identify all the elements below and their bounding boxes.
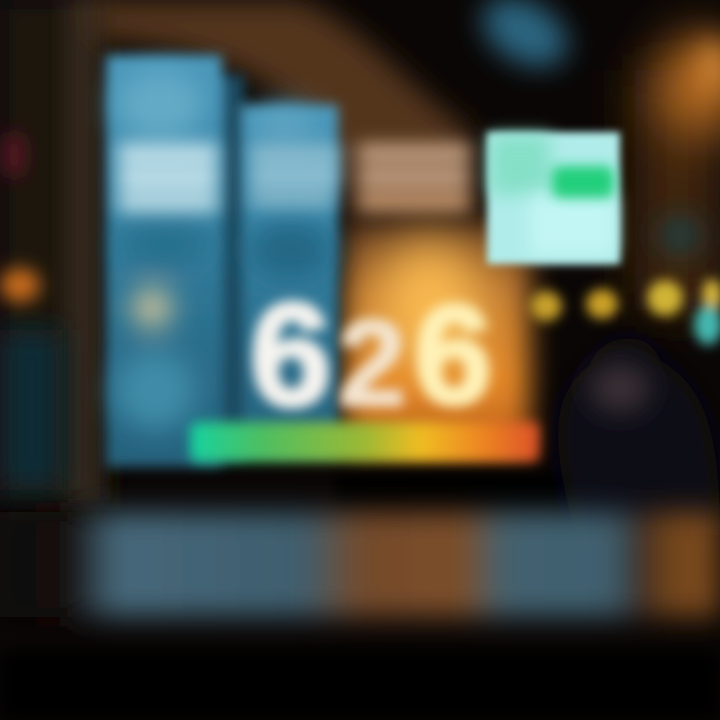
screen panel: chart display [487,132,620,264]
right wall: orange glow [635,35,720,310]
central warm glow [345,222,530,450]
score number: 2 [338,295,406,431]
score number: 6 [414,276,492,433]
window water highlights [115,69,332,430]
foreground: black table edge [0,650,720,720]
dark counter below bar [335,474,570,508]
row of lights [530,279,720,345]
left wall lights [0,131,62,490]
score number [250,273,492,436]
person silhouette [558,338,720,535]
ceiling arch: warm wood [90,0,470,215]
ceiling skylight [470,0,580,81]
window: blue panes [106,55,338,467]
heading: blurred text rows [118,144,470,212]
table reflections [0,512,720,617]
score number: 6 [250,273,331,436]
gradient score bar [190,422,540,462]
